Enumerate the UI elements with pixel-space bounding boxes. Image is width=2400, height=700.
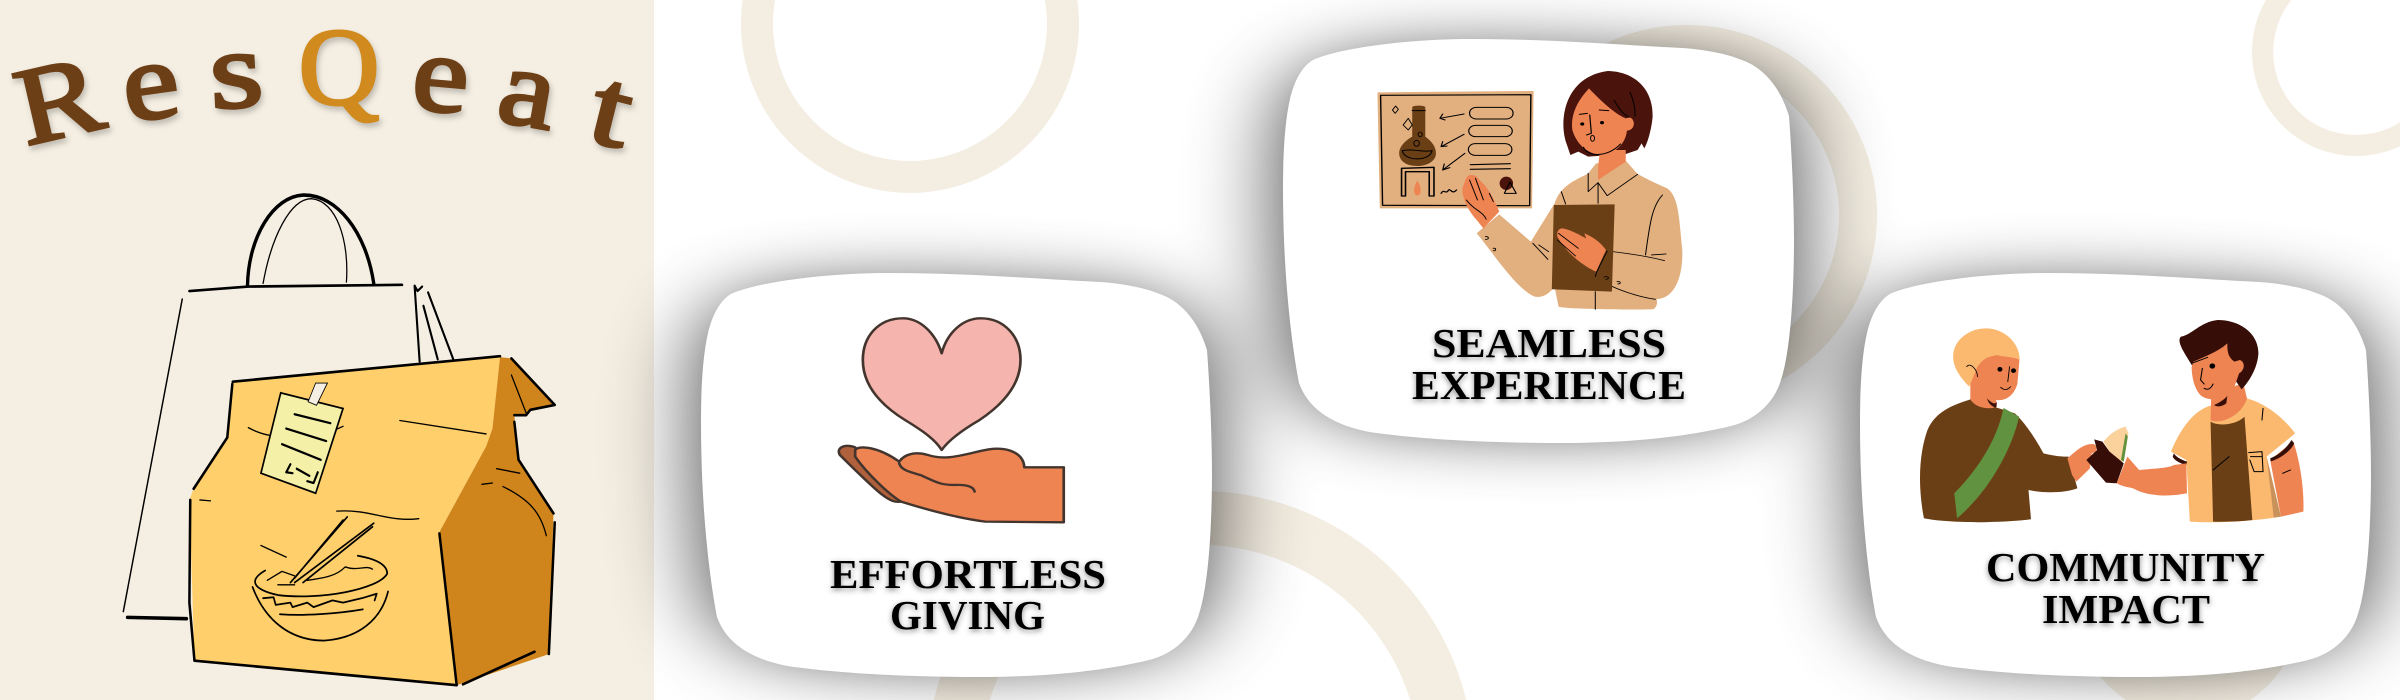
left brand panel (0, 0, 654, 700)
title: ResQeat: t (579, 44, 645, 172)
card: seamless experience (1283, 39, 1794, 443)
sticky note (261, 383, 343, 493)
card: community impact (1860, 273, 2371, 677)
card: effortless giving (701, 273, 1212, 677)
noodle bowl icon (253, 517, 388, 641)
left hand (2067, 444, 2097, 482)
right arm (2117, 457, 2187, 495)
heading: effortless giving (830, 551, 1106, 638)
card shadows (701, 53, 2371, 663)
chart poster (1377, 91, 1534, 208)
title: ResQeat: R (4, 31, 114, 169)
heading: seamless experience: SEAMLESS (1432, 320, 1666, 366)
illustration: two people sharing a sandwich (1920, 320, 2303, 522)
title: ResQeat: e (114, 17, 186, 146)
icon: hand holding heart (839, 318, 1064, 522)
right person (2117, 320, 2303, 522)
front paper bag (189, 356, 555, 685)
title: ResQeat: a (490, 23, 567, 154)
neck (1598, 150, 1626, 180)
heading: community impact: COMMUNITY (1986, 544, 2265, 590)
collar lines and shirt details (1533, 173, 1666, 309)
face (1572, 88, 1634, 155)
heading: seamless experience: EXPERIENCE (1412, 362, 1686, 408)
heading: community impact: IMPACT (2042, 586, 2210, 632)
clipboard (1552, 204, 1615, 292)
raised hand (1462, 175, 1499, 228)
hand on clipboard (1557, 228, 1606, 272)
hair (1563, 71, 1653, 157)
heading: community impact (1986, 544, 2265, 632)
heading: effortless giving: EFFORTLESS (830, 551, 1106, 597)
sandwich and wrapper (2086, 427, 2128, 483)
illustration: takeaway paper bags (123, 195, 555, 685)
title: ResQeat: s (206, 8, 266, 132)
body and shirt (1477, 161, 1682, 310)
illustration: woman presenting chart (1377, 71, 1682, 310)
left person (1920, 328, 2097, 522)
title: ResQeat (4, 7, 645, 172)
heading: effortless giving: GIVING (890, 592, 1045, 638)
back shopping bag (123, 195, 453, 619)
background rings (741, 0, 2400, 700)
title: ResQeat: Q (298, 7, 380, 129)
sleeve buttons (1485, 237, 1620, 284)
title: ResQeat: e (408, 11, 475, 137)
heading: seamless experience (1412, 320, 1686, 408)
